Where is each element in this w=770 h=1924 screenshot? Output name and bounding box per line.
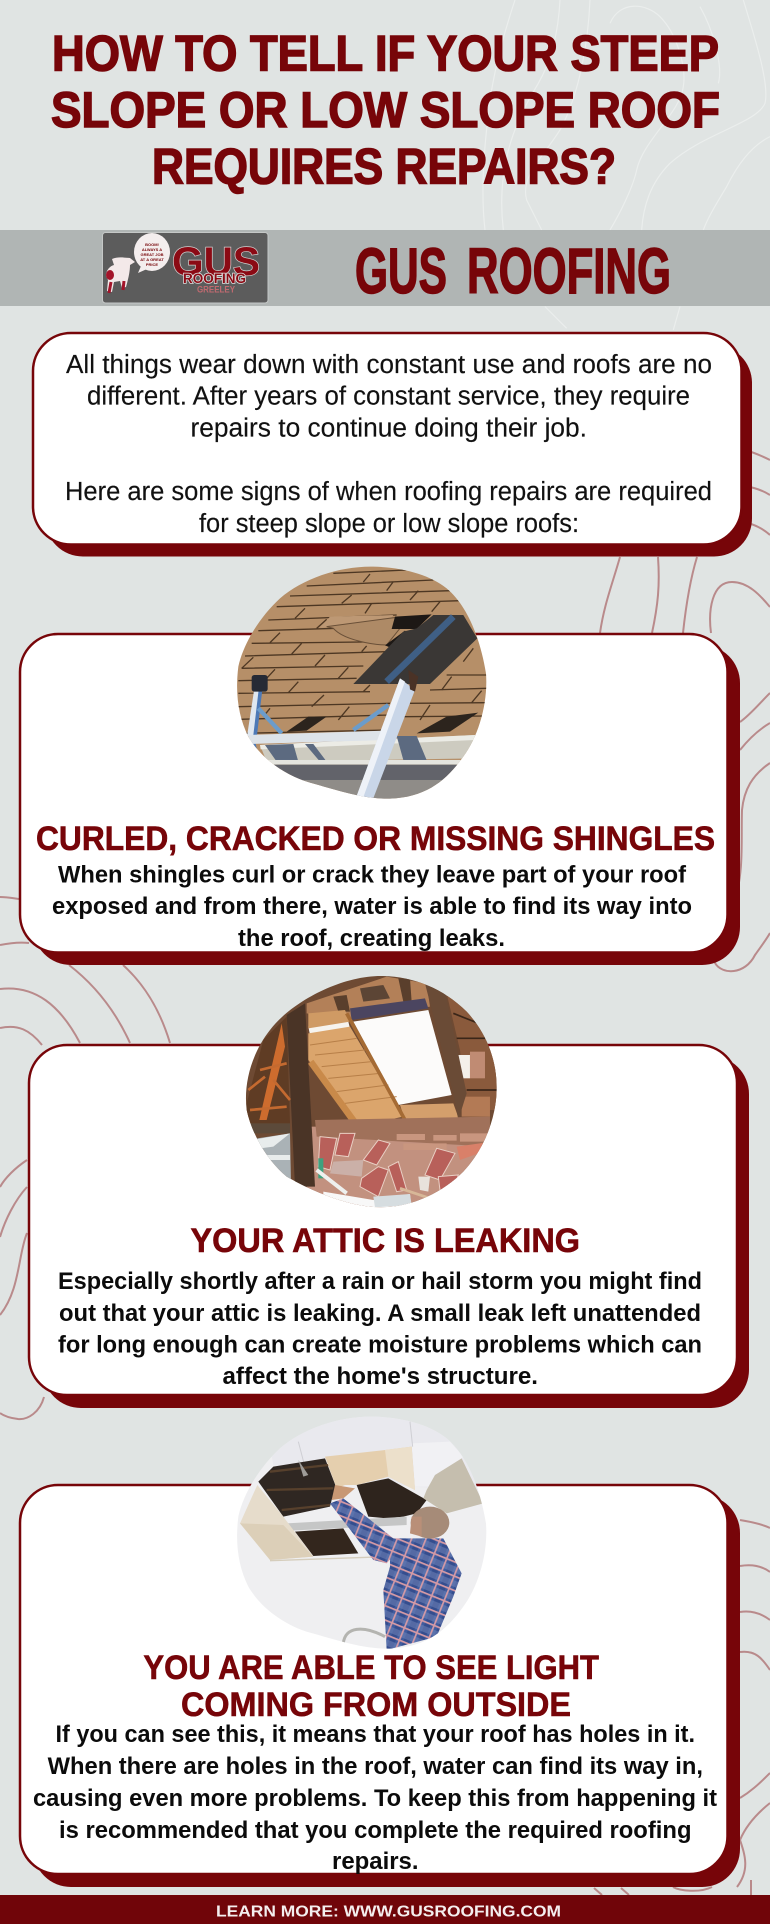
photo: collapsed attic: [246, 976, 497, 1208]
body text: the roof, creating leaks.: [238, 925, 505, 952]
logo: Gus Roofing Greeley: ROOFING: [183, 270, 246, 286]
intro text: Here are some signs of when roofing repairs are required: [65, 478, 712, 506]
photo: damaged shingles and ladder: [237, 566, 486, 799]
body text: exposed and from there, water is able to find its way into: [52, 893, 692, 920]
footer bar: [0, 1895, 770, 1924]
logo: Gus Roofing Greeley: BOOM!: [145, 242, 159, 247]
panel: you are able to see light coming from outside: [20, 1410, 740, 1887]
body text: causing even more problems. To keep this from happening it: [33, 1785, 717, 1812]
brand band: [0, 230, 770, 307]
panel: introduction: [33, 333, 752, 556]
panel: your attic is leaking: [29, 970, 749, 1408]
logo: Gus Roofing Greeley: GREELEY: [197, 284, 236, 296]
logo: Gus Roofing Greeley: [102, 232, 268, 303]
title: SLOPE OR LOW SLOPE ROOF: [51, 82, 720, 138]
body text: is recommended that you complete the required roofing: [59, 1817, 692, 1844]
heading: COMING FROM OUTSIDE: [181, 1686, 571, 1724]
heading: [143, 1649, 599, 1724]
logo: Gus Roofing Greeley: PRICE: [146, 262, 158, 267]
body text: affect the home's structure.: [222, 1363, 538, 1390]
intro text: All things wear down with constant use and roofs are no: [66, 351, 712, 379]
title: [51, 26, 720, 194]
intro text: different. After years of constant service, they require: [87, 383, 690, 411]
body text: When shingles curl or crack they leave part of your roof: [58, 862, 687, 889]
title: HOW TO TELL IF YOUR STEEP: [52, 26, 719, 82]
heading: CURLED, CRACKED OR MISSING SHINGLES: [36, 820, 715, 858]
heading: YOUR ATTIC IS LEAKING: [190, 1222, 580, 1260]
body text: [52, 862, 692, 952]
body text: Especially shortly after a rain or hail storm you might find: [58, 1268, 702, 1295]
logo: Gus Roofing Greeley: GREAT JOB: [140, 252, 164, 257]
body text: When there are holes in the roof, water can find its way in,: [48, 1753, 703, 1780]
heading: YOU ARE ABLE TO SEE LIGHT: [143, 1649, 599, 1687]
logo: Gus Roofing Greeley: AT A GREAT: [140, 257, 164, 262]
panel: curled, cracked or missing shingles: [20, 560, 740, 965]
body text: repairs.: [332, 1848, 418, 1875]
intro text: for steep slope or low slope roofs:: [199, 510, 579, 538]
body text: out that your attic is leaking. A small leak left unattended: [59, 1300, 701, 1327]
body text: for long enough can create moisture problems which can: [58, 1332, 702, 1359]
brand name: [355, 235, 671, 307]
title: REQUIRES REPAIRS?: [152, 138, 616, 194]
logo: Gus Roofing Greeley: GUS: [172, 240, 260, 284]
intro text: [65, 351, 712, 538]
photo: man inspecting ceiling hole: [237, 1416, 486, 1649]
footer bar: LEARN MORE: WWW.GUSROOFING.COM: [216, 1904, 561, 1921]
logo: Gus Roofing Greeley: ALWAYS A: [142, 247, 162, 252]
intro text: repairs to continue doing their job.: [190, 414, 587, 442]
body text: [58, 1268, 702, 1390]
brand name: GUS: [355, 235, 447, 307]
brand name: ROOFING: [467, 235, 671, 307]
body text: [33, 1721, 717, 1875]
body text: If you can see this, it means that your roof has holes in it.: [56, 1721, 695, 1748]
